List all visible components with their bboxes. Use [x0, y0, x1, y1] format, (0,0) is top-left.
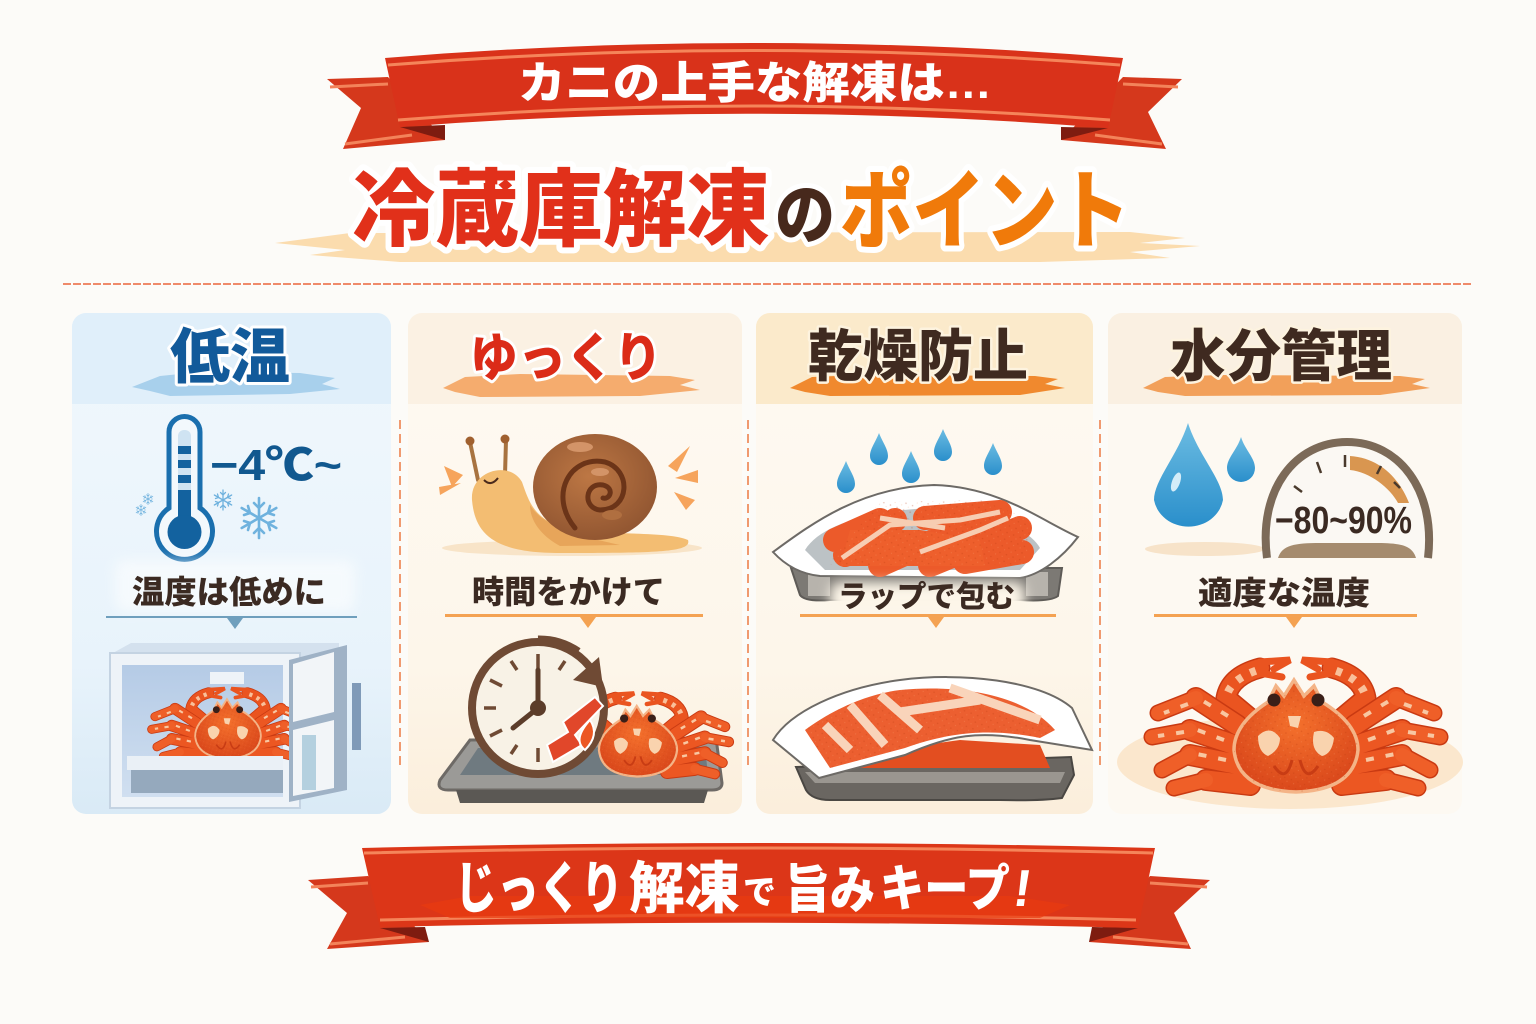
illustration: crab in refrigerator: [110, 643, 361, 808]
top ribbon banner: [327, 43, 1182, 149]
icon: thermometer: [156, 417, 213, 559]
pointer line: [445, 614, 703, 628]
main title: 冷蔵庫解凍: [352, 163, 770, 257]
heading brush: [1143, 375, 1430, 396]
ribbon text: じっくり: [455, 857, 623, 920]
ribbon text: 解凍: [629, 857, 740, 920]
illustration: clock and crab on tray: [439, 640, 729, 803]
title brush underlay: [275, 232, 1200, 262]
separator: [747, 420, 749, 765]
pointer line: [1154, 614, 1417, 628]
ribbon text: で: [743, 874, 776, 912]
sub label: 温度は低めに: [132, 574, 326, 610]
panel: 乾燥防止: [756, 313, 1093, 814]
icon: snowflakes: [136, 490, 276, 538]
pointer line: [106, 616, 357, 629]
icon: humidity gauge: [1266, 442, 1429, 558]
sub label: 時間をかけて: [472, 574, 665, 610]
heading brush: [443, 374, 700, 397]
icon: snail: [439, 434, 702, 556]
illustration: wrapped crab in tray: [773, 677, 1092, 800]
ribbon text: カニの上手な解凍は…: [518, 59, 992, 108]
main title: [352, 163, 1130, 260]
sub label: ラップで包む: [838, 581, 1015, 614]
panel: 水分管理: [1108, 313, 1463, 814]
sub label: [115, 560, 355, 612]
sub label: 適度な温度: [1198, 575, 1370, 611]
heading: 低温: [170, 324, 290, 391]
heading: ゆっくり: [470, 330, 662, 388]
ribbon text: キープ: [880, 861, 1010, 917]
ribbon text: 旨み: [785, 862, 875, 920]
temperature value: −4℃~: [210, 441, 342, 490]
ribbon text: [455, 857, 1035, 920]
gauge value: −80~90%: [1275, 500, 1412, 542]
heading brush: [790, 375, 1065, 396]
heading: 乾燥防止: [808, 325, 1028, 388]
heading brush: [132, 372, 340, 396]
icon: water drops: [1145, 423, 1265, 556]
illustration: wrapped crab on tray: [773, 485, 1078, 600]
ribbon text: !: [1010, 860, 1035, 918]
heading: 水分管理: [1170, 325, 1392, 388]
separator: [1099, 420, 1101, 765]
illustration: crab on plate: [1117, 660, 1463, 809]
pointer line: [800, 614, 1056, 628]
bottom ribbon banner: [308, 843, 1210, 949]
separator: [399, 420, 401, 765]
main title: の: [775, 178, 835, 252]
main title: ポイント: [840, 164, 1130, 260]
panel: ゆっくり: [408, 313, 742, 814]
icon: water drops: [837, 429, 1002, 493]
panel: 低温: [72, 313, 391, 814]
